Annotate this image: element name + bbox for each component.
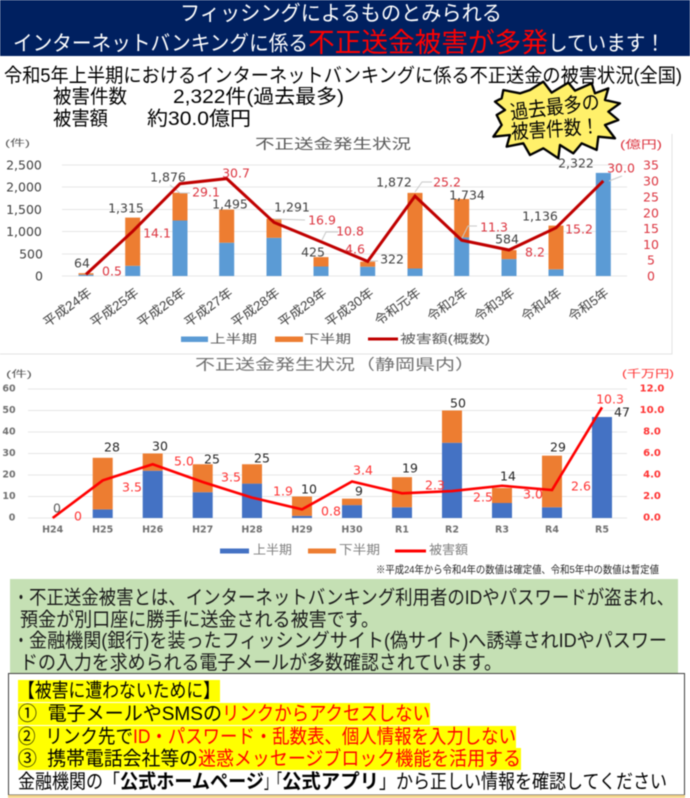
year labels: R2: [445, 524, 459, 536]
damage amount labels: 3.0: [523, 486, 543, 502]
right axis: 15: [643, 221, 659, 236]
left axis: 500: [19, 246, 43, 262]
official sources note: 公式アプリ: [282, 771, 379, 793]
left axis: 50: [2, 405, 16, 416]
year labels: 平成28年: [228, 285, 282, 330]
damage amount labels: 30.0: [607, 160, 635, 176]
damage amount labels: 2.5: [473, 490, 493, 504]
year labels: [40, 285, 611, 330]
chart frame: [0, 134, 672, 354]
summary heading: [4, 65, 682, 130]
left axis: 1,000: [6, 224, 42, 239]
legend: 上半期: [210, 332, 257, 346]
tip highlights: [18, 680, 521, 770]
tip 1: [18, 703, 430, 725]
year labels: 平成30年: [322, 285, 376, 330]
right axis: 8.0: [643, 426, 661, 438]
legend: 被害額: [429, 542, 469, 557]
legend: [181, 331, 490, 346]
left axis: 0: [35, 268, 43, 284]
left axis: [2, 368, 32, 524]
case count labels: 30: [152, 438, 168, 454]
footnote: ※平成24年から令和4年の数値は確定値、令和5年中の数値は暫定値: [376, 563, 659, 576]
case count labels: 322: [380, 252, 404, 266]
damage amount labels: 2.6: [571, 478, 591, 494]
left axis: 30: [2, 448, 16, 459]
callout: record high burst: 被害件数！: [510, 115, 600, 144]
year labels: 令和2年: [424, 285, 470, 324]
damage amount labels: 0.5: [102, 264, 122, 278]
case count labels: 47: [614, 404, 630, 420]
right axis: 0.0: [643, 512, 661, 524]
right axis: 6.0: [643, 448, 661, 459]
case count labels: 1,291: [274, 200, 310, 214]
year labels: H27: [192, 524, 213, 536]
tips heading: 【被害に遭わないために】: [18, 680, 220, 702]
summary heading: 約30.0億円: [147, 108, 251, 130]
year labels: R3: [495, 524, 509, 536]
legend: 下半期: [339, 543, 380, 557]
case count labels: 28: [104, 440, 120, 454]
official sources note: 金融機関の「: [18, 771, 120, 793]
tip 1: ① 電子メールやSMSの: [18, 703, 222, 725]
right axis: 10: [643, 237, 659, 252]
damage amount labels: 0: [74, 508, 82, 524]
case count labels: 25: [204, 452, 220, 466]
right axis: 10.0: [640, 405, 664, 416]
right axis: [622, 368, 674, 524]
chart title: 不正送金発生状況（静岡県内）: [195, 356, 475, 374]
year labels: H30: [341, 524, 363, 536]
bars: second half: [93, 410, 562, 516]
header banner: インターネットバンキングに係る: [13, 32, 308, 56]
case count labels: 1,872: [376, 174, 412, 190]
year labels: 平成29年: [275, 285, 329, 330]
damage amount labels: 3.5: [122, 480, 142, 494]
case count labels: 2,322: [558, 156, 594, 170]
legend: 被害額(概数): [400, 331, 490, 346]
right axis: 4.0: [643, 470, 661, 480]
year labels: 令和元年: [372, 285, 423, 328]
left axis: (件): [6, 368, 32, 379]
case count labels: 1,876: [150, 170, 186, 184]
left axis: 1,500: [6, 202, 42, 217]
tip 3: ③ 携帯電話会社等の: [18, 748, 198, 770]
tip 2: ② リンク先で: [18, 726, 133, 748]
case count labels: 14: [500, 468, 516, 484]
case count labels: 50: [450, 396, 466, 410]
right axis: 30: [643, 174, 659, 188]
tip 3: 迷惑メッセージブロック機能を活用する: [198, 747, 521, 770]
left axis: 2,500: [6, 158, 42, 172]
year labels: 平成27年: [181, 285, 235, 330]
left axis: 0: [9, 512, 16, 524]
left axis: 10: [2, 491, 16, 502]
callout: record high burst: [493, 82, 620, 158]
damage amount labels: 30.7: [222, 166, 250, 180]
case count labels: 29: [550, 440, 566, 454]
damage amount labels: 3.4: [353, 462, 373, 478]
right axis: 25: [643, 190, 659, 204]
damage amount labels: 25.2: [433, 174, 461, 190]
year labels: 平成25年: [87, 285, 141, 330]
case count labels: 1,495: [212, 196, 248, 212]
left axis: 40: [2, 426, 16, 438]
right axis: (千万円): [622, 368, 674, 380]
callout: record high burst: 過去最多の: [509, 91, 601, 124]
damage amount labels: 8.2: [525, 244, 545, 260]
damage amount labels: 16.9: [308, 212, 336, 228]
official sources note: 」「: [264, 771, 282, 793]
header banner: フィッシングによるものとみられる: [180, 2, 502, 26]
legend: 下半期: [304, 332, 351, 346]
year labels: 令和3年: [471, 285, 517, 324]
year labels: R4: [545, 524, 559, 536]
damage amount labels: 14.1: [143, 226, 171, 240]
right axis: [620, 138, 662, 284]
year labels: [42, 524, 609, 536]
case count labels: 0: [53, 500, 61, 516]
left axis: 2,000: [6, 180, 42, 194]
bars: second half: [78, 193, 564, 275]
damage amount labels: 4.6: [345, 242, 365, 256]
case count labels: 64: [74, 256, 90, 270]
right axis: 0: [647, 268, 655, 284]
left axis: (件): [5, 137, 30, 148]
year labels: H25: [92, 524, 113, 536]
tip 3: [18, 747, 521, 770]
left axis: 20: [2, 470, 16, 480]
damage amount labels: 10.8: [336, 224, 364, 238]
header banner: 不正送金被害が多発: [308, 28, 548, 58]
year labels: H24: [42, 524, 64, 536]
damage amount line: [86, 179, 603, 274]
right axis: 5: [647, 252, 655, 268]
case count labels: [74, 156, 594, 270]
case count labels: 584: [495, 232, 519, 246]
damage amount labels: 2.3: [425, 478, 445, 492]
year labels: R1: [395, 524, 409, 536]
case count labels: 1,315: [108, 200, 144, 216]
right axis: 20: [643, 206, 659, 220]
damage amount labels: 0.8: [321, 504, 341, 518]
chart title: 不正送金発生状況: [255, 136, 411, 152]
damage amount labels: 10.3: [596, 392, 624, 406]
case count labels: 1,136: [522, 208, 558, 224]
tip 1: リンクからアクセスしない: [222, 703, 430, 725]
summary heading: 被害件数: [53, 86, 127, 108]
damage amount labels: 11.3: [480, 220, 508, 234]
panel: explanation: 預金が別口座に勝手に送金される被害です。: [20, 609, 379, 631]
case count labels: 425: [301, 244, 325, 260]
case count labels: 10: [301, 482, 317, 496]
case count labels: 9: [355, 484, 363, 498]
damage amount labels: 5.0: [174, 454, 194, 468]
year labels: H26: [142, 524, 164, 536]
damage amount labels: 29.1: [192, 184, 220, 200]
panel: explanation: ドの入力を求められる電子メールが多数確認されています。: [20, 652, 502, 674]
official sources note: [18, 771, 667, 793]
left axis: 60: [2, 384, 16, 394]
legend: [220, 542, 469, 557]
year labels: 平成26年: [134, 285, 188, 330]
right axis: 2.0: [643, 491, 661, 502]
official sources note: 公式ホームページ: [120, 771, 264, 793]
left axis: [5, 137, 43, 284]
bars: first half: [93, 417, 612, 518]
summary heading: 2,322件(過去最多): [173, 86, 344, 108]
bars: first half: [78, 173, 611, 276]
panel: explanation: ・: [14, 587, 28, 609]
panel: prevention tips: [8, 674, 685, 798]
year labels: 令和4年: [518, 285, 564, 324]
right axis: 12.0: [640, 384, 664, 394]
damage amount line: [53, 407, 602, 518]
case count labels: 1,734: [449, 188, 485, 202]
case count labels: 25: [254, 450, 270, 466]
damage amount labels: [102, 160, 635, 278]
panel: explanation: [10, 579, 678, 675]
right axis: 35: [643, 158, 659, 172]
summary heading: 被害額: [53, 108, 108, 130]
year labels: H28: [241, 524, 263, 536]
chart: Shizuoka prefecture: [2, 356, 674, 576]
damage amount labels: [74, 392, 624, 524]
damage amount labels: 1.9: [273, 484, 293, 498]
tip 2: ID・パスワード・乱数表、個人情報を入力しない: [133, 726, 516, 748]
damage amount labels: 15.2: [565, 222, 593, 236]
right axis: (億円): [620, 138, 662, 151]
panel: explanation: ・: [14, 630, 28, 652]
header banner: しています！: [548, 32, 665, 56]
year labels: 令和5年: [565, 285, 611, 324]
case count labels: 19: [402, 460, 418, 476]
damage amount labels: 3.5: [221, 470, 241, 484]
year labels: R5: [595, 524, 609, 536]
legend: 上半期: [253, 543, 292, 557]
year labels: 平成24年: [40, 285, 94, 330]
chart: national unauthorized transfers: [0, 134, 672, 354]
header banner: [0, 0, 690, 58]
case count labels: [53, 396, 630, 516]
year labels: H29: [291, 524, 313, 536]
